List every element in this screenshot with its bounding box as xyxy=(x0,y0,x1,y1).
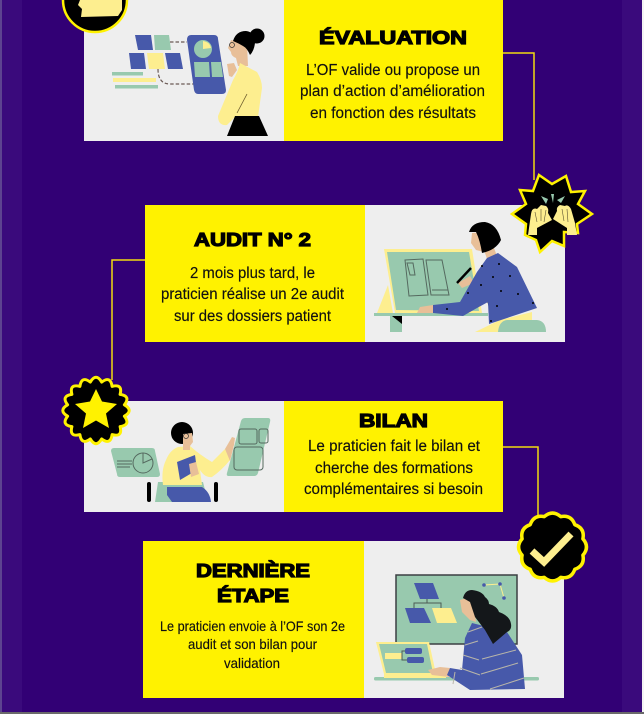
text panel xyxy=(143,541,364,698)
panel: dernière étape xyxy=(143,541,564,698)
illustration: woman at drawing board xyxy=(374,222,546,332)
heading: dernière étape: DERNIÈRE xyxy=(196,560,310,581)
body text: audit et son bilan pour xyxy=(188,636,317,652)
badge: thumb icon xyxy=(63,0,127,32)
body text: complémentaires si besoin xyxy=(304,481,483,498)
connector: évaluation to audit xyxy=(503,53,534,180)
illustration background xyxy=(365,205,565,342)
illustration: person with book and screens xyxy=(111,418,270,502)
body text: cherche des formations xyxy=(315,460,473,477)
body text xyxy=(300,62,485,122)
panel: bilan xyxy=(84,401,503,512)
heading: bilan: BILAN xyxy=(359,410,428,431)
body text: Le praticien fait le bilan et xyxy=(308,438,481,455)
text panel xyxy=(284,0,503,141)
badge: star xyxy=(63,377,129,444)
panel: évaluation xyxy=(84,0,503,141)
body text: plan d’action d’amélioration xyxy=(300,83,485,100)
panel: audit n° 2 xyxy=(145,205,565,342)
illustration background xyxy=(364,541,564,698)
body text: L’OF valide ou propose un xyxy=(306,62,480,79)
text panel xyxy=(284,401,503,512)
illustration background xyxy=(84,0,284,141)
body text: en fonction des résultats xyxy=(310,105,476,122)
body text: sur des dossiers patient xyxy=(174,308,332,325)
badge: check mark xyxy=(519,513,586,581)
heading: évaluation: ÉVALUATION xyxy=(319,27,467,48)
illustration: woman at laptop with chart board xyxy=(374,575,539,690)
heading: dernière étape xyxy=(196,560,310,606)
connector: bilan to dernière étape xyxy=(503,447,538,516)
body text: validation xyxy=(224,655,280,671)
body text: Le praticien envoie à l’OF son 2e xyxy=(160,618,345,634)
body text xyxy=(304,438,483,498)
illustration background xyxy=(84,401,284,512)
connector: audit to bilan xyxy=(112,260,145,380)
body text: praticien réalise un 2e audit xyxy=(161,286,345,303)
body text: 2 mois plus tard, le xyxy=(190,265,315,282)
badge: hands over face xyxy=(512,175,592,252)
illustration: woman with tablet xyxy=(112,28,268,136)
heading: audit n° 2: AUDIT N° 2 xyxy=(194,229,311,250)
heading: dernière étape: ÉTAPE xyxy=(217,585,289,606)
body text xyxy=(160,618,345,671)
body text xyxy=(161,265,345,325)
text panel xyxy=(145,205,365,342)
